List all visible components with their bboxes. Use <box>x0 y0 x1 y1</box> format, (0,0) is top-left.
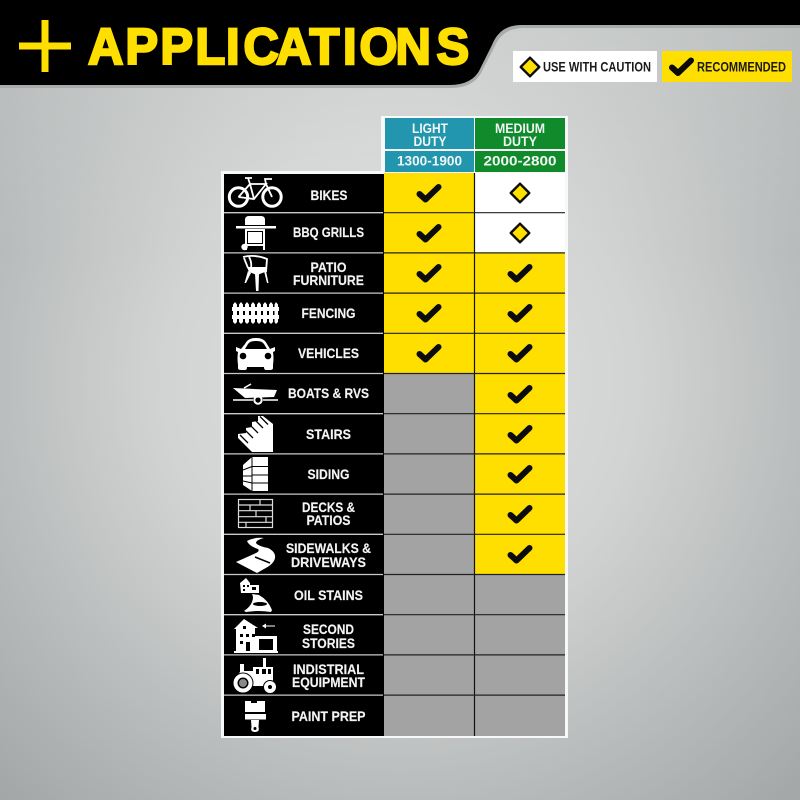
row labels: BIKES <box>310 188 348 203</box>
row labels: VEHICLES <box>298 346 359 361</box>
column header: medium duty: MEDIUM <box>495 121 545 136</box>
row labels: FURNITURE <box>293 273 364 288</box>
row labels: OIL STAINS <box>294 588 363 603</box>
header band <box>0 0 800 88</box>
legend: use with caution <box>513 51 657 82</box>
row labels: PATIO <box>310 260 346 275</box>
column header: light duty <box>385 118 474 172</box>
icon: paint brush <box>245 701 266 732</box>
column header: light duty: 1300-1900 <box>397 154 462 168</box>
row labels: SIDING <box>308 467 350 482</box>
medium duty cells <box>475 173 565 736</box>
row labels: BBQ GRILLS <box>293 225 364 240</box>
column header: medium duty <box>475 118 565 172</box>
row labels: PAINT PREP <box>292 709 366 724</box>
light duty check marks <box>420 187 438 360</box>
row labels: DECKS & <box>302 500 355 515</box>
row labels: STAIRS <box>306 427 351 442</box>
icon: car <box>236 338 275 370</box>
icon: sidewalk <box>236 538 275 573</box>
light duty cells <box>384 173 474 736</box>
label column <box>224 174 384 736</box>
row labels: EQUIPMENT <box>292 675 366 690</box>
row labels: SECOND <box>303 622 354 637</box>
icon: fence <box>232 302 279 324</box>
row labels: BOATS & RVS <box>288 386 369 401</box>
row labels: DRIVEWAYS <box>291 555 366 570</box>
icon: siding <box>243 457 268 491</box>
column header: light duty: DUTY <box>414 134 446 149</box>
table grid lines <box>224 173 565 736</box>
row labels: PATIOS <box>306 513 350 528</box>
icon: oil stains <box>240 578 272 612</box>
legend: recommended <box>662 51 792 82</box>
column header: medium duty: DUTY <box>503 134 537 149</box>
row labels <box>286 188 371 724</box>
table backing <box>221 116 568 738</box>
column header: medium duty: 2000-2800 <box>484 154 556 168</box>
column header: light duty: LIGHT <box>412 121 449 136</box>
row labels: INDISTRIAL <box>293 662 364 677</box>
legend: use with caution: USE WITH CAUTION <box>543 60 651 74</box>
icon: bike <box>229 178 281 206</box>
row labels: FENCING <box>302 306 356 321</box>
row labels: STORIES <box>302 636 355 651</box>
icon: bbq grill <box>236 216 276 250</box>
row labels: SIDEWALKS & <box>286 541 371 556</box>
title: APPLICATIONS <box>88 18 469 75</box>
icon: stairs <box>238 416 273 452</box>
icon: brick deck <box>238 500 272 528</box>
icon: boat on trailer <box>233 384 278 404</box>
icon: house second story <box>234 619 278 653</box>
icon: yellow plus <box>19 20 71 72</box>
icon: tractor <box>233 658 276 694</box>
medium duty marks <box>510 184 530 560</box>
icon: patio chair <box>243 256 268 291</box>
